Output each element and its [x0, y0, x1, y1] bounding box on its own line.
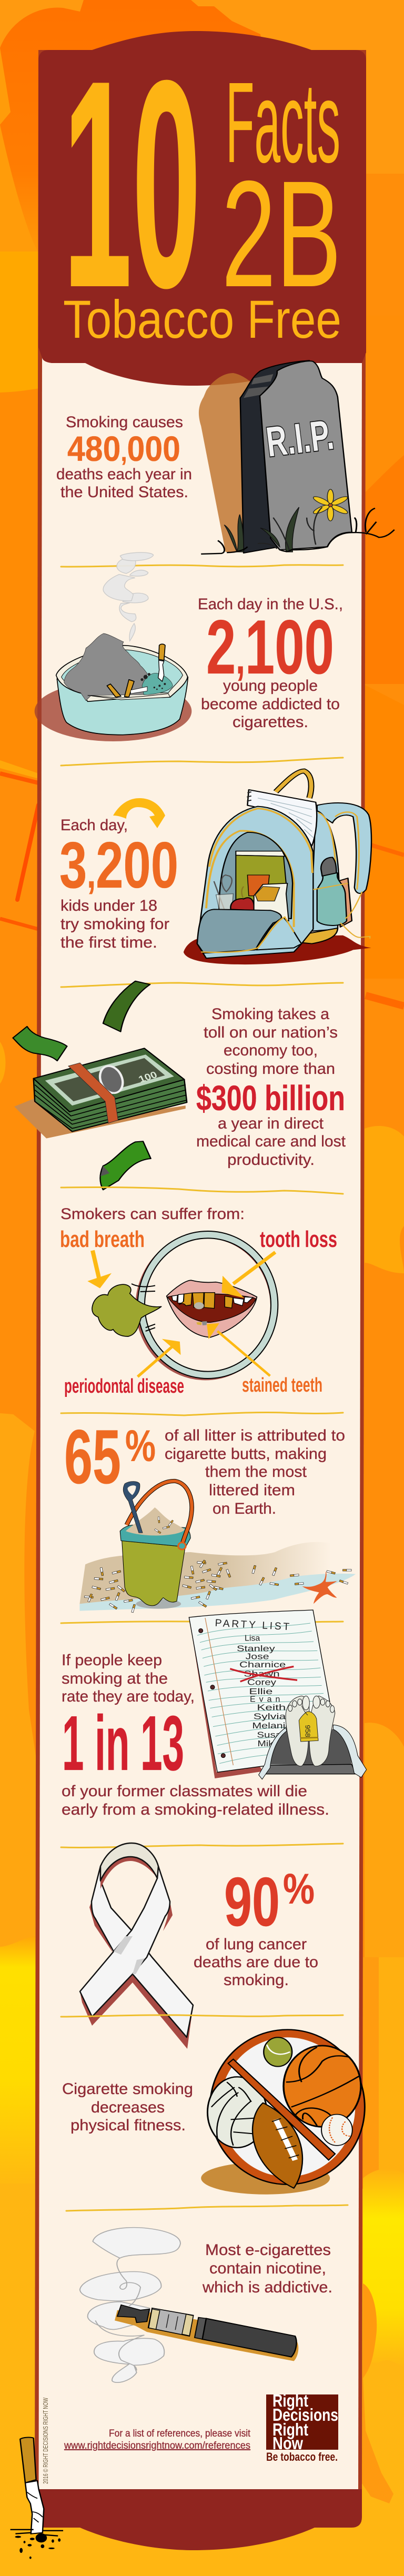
text: 2,100 young people — [198, 596, 343, 731]
text: e-cigarettes contain nicotine: contain nicotine, — [209, 2260, 326, 2277]
icon: party list and feet with toe tag: Jose — [246, 1652, 269, 1661]
icon: party list and feet with toe tag: Mike — [257, 1739, 279, 1748]
text: 3,200 kids under 18: kids under 18 — [60, 897, 157, 914]
text: 65% statistic: 65 — [64, 1414, 121, 1500]
logo: Right Decisions Right Now: Decisions — [272, 2405, 338, 2424]
icon: party list and feet with toe tag: Evan — [250, 1695, 280, 1704]
icon: awareness ribbon — [80, 1843, 193, 2049]
text: e-cigarettes contain nicotine: Most e-cigarettes — [205, 2241, 331, 2259]
text: if people keep smoking — [62, 1652, 195, 1705]
icon: party list and feet with toe tag: Melanie — [252, 1722, 291, 1730]
text: e-cigarettes contain nicotine: which is addictive. — [202, 2279, 332, 2296]
text: decreases physical fitness — [62, 2080, 193, 2134]
icon: money — [13, 981, 187, 1190]
text: $300 billion toll: $300 billion — [196, 1079, 345, 1118]
text: $300 billion toll — [196, 1005, 346, 1169]
logo: Right Decisions Right Now — [266, 2391, 338, 2463]
icon: tombstone — [199, 360, 395, 554]
fact 5: smokers can suffer from — [60, 1205, 337, 1397]
references note: For a list of references, please visit — [109, 2428, 251, 2439]
footer: credits and logo — [11, 2391, 362, 2559]
fact 9: physical fitness — [62, 2034, 361, 2195]
text: $300 billion toll: medical care and lost — [196, 1133, 346, 1150]
label: stained teeth: stained teeth — [242, 1374, 322, 1396]
logo: Right Decisions Right Now: Now — [272, 2433, 303, 2453]
icon: party list and feet with toe tag: Stanley — [237, 1644, 275, 1653]
title: Tobacco Free: Tobacco Free — [63, 289, 341, 349]
text: 90% of lung cancer deaths: of lung cancer — [206, 1936, 307, 1953]
text: 3,200 kids under 18: 3,200 — [59, 829, 178, 902]
icon: party list and feet with toe tag: 958 — [304, 1725, 311, 1737]
icon: ashtray — [35, 552, 191, 741]
text: 65% statistic: littered item — [209, 1482, 295, 1499]
text: $300 billion toll: costing more than — [206, 1060, 335, 1078]
icon: e-cigarette with vapor — [80, 2228, 298, 2382]
statistic: 1 in 13: 1 in 13 — [62, 1700, 184, 1787]
icon: party list and feet with toe tag: Sylvia — [254, 1712, 286, 1721]
text: smoking causes 480,000 deaths — [56, 414, 192, 501]
text: decreases physical fitness: Cigarette smoking — [62, 2080, 193, 2098]
text: former classmates — [62, 1783, 329, 1818]
text: decreases physical fitness: physical fitness. — [70, 2117, 186, 2134]
icon: mouth diagram — [88, 1235, 275, 1377]
text: 65% statistic: cigarette butts, making — [165, 1445, 327, 1463]
icon: stubbed cigarette butt — [11, 2438, 63, 2559]
text: former classmates: early from a smoking-related illness. — [62, 1801, 329, 1818]
text: 2,100 young people: 2,100 — [206, 604, 334, 690]
text: 2,100 young people: Each day in the U.S., — [198, 596, 343, 613]
fact 1: deaths each year — [56, 360, 395, 554]
icon: sports balls with prohibition sign — [201, 2034, 361, 2195]
text: former classmates: of your former classmates will die — [62, 1783, 307, 1800]
text: $300 billion toll: toll on our nation’s — [204, 1024, 338, 1041]
text: 3,200 kids under 18: the first time. — [60, 934, 157, 951]
text: 2,100 young people: young people — [223, 677, 318, 695]
fact 6: 65% of litter — [64, 1414, 358, 1613]
icon: curved arrow — [113, 798, 165, 828]
text: smoking causes 480,000 deaths: deaths each year in — [56, 466, 192, 483]
text: $300 billion toll: economy too, — [224, 1042, 318, 1059]
icon: party list and feet with toe tag: Ellie — [249, 1687, 272, 1696]
text: $300 billion toll: a year in direct — [218, 1115, 324, 1132]
logo: Right Decisions Right Now: Be tobacco free. — [266, 2450, 338, 2463]
text: if people keep smoking: If people keep — [62, 1652, 162, 1669]
text: 90% of lung cancer deaths: deaths are due to — [194, 1954, 318, 1971]
icon: party list and feet with toe tag: Corey — [247, 1678, 276, 1687]
bottom banner — [35, 2489, 362, 2550]
icon: backpack — [184, 771, 371, 964]
fact 7: 1 in 13 classmates — [62, 1610, 367, 1818]
label: bad breath: bad breath — [60, 1226, 145, 1252]
icon: R.I.P. inscription: R.I.P. — [264, 411, 336, 466]
text: decreases physical fitness: decreases — [91, 2099, 165, 2116]
text: smoking causes 480,000 deaths: Smoking causes — [66, 414, 183, 431]
header banner: 10 — [63, 19, 201, 349]
text: if people keep smoking: rate they are today, — [62, 1688, 195, 1705]
fact 8: 90% of lung cancer — [80, 1843, 318, 2049]
icon: party list and feet with toe tag: Shawn — [244, 1670, 280, 1679]
text: 90% of lung cancer deaths — [194, 1863, 318, 1989]
references note: www.rightdecisionsrightnow.com/references — [64, 2440, 250, 2451]
text: 3,200 kids under 18 — [59, 817, 178, 951]
text: 65% statistic: of all litter is attributed to — [165, 1427, 345, 1444]
text: 3,200 kids under 18: Each day, — [60, 817, 128, 834]
icon: money: 100 — [137, 1070, 159, 1085]
icon: party list and feet with toe tag: Charnice — [239, 1661, 286, 1669]
text: 65% statistic: % — [125, 1421, 156, 1471]
fact 3: kids try smoking — [59, 771, 371, 964]
label: tooth loss: tooth loss — [260, 1226, 337, 1252]
references note — [64, 2428, 251, 2451]
panel: cream body with brick border — [35, 50, 366, 2489]
text: $300 billion toll: productivity. — [227, 1151, 315, 1169]
icon: party list and feet with toe tag: Susan — [257, 1730, 288, 1739]
label: periodontal disease: periodontal disease — [64, 1375, 184, 1397]
fact 2: young people addicted — [35, 552, 343, 741]
icon: beach bucket with cigarette butts — [79, 1481, 358, 1613]
icon: party list and feet with toe tag: Lisa — [245, 1634, 260, 1643]
text: 65% statistic — [64, 1414, 345, 1517]
text: 2,100 young people: become addicted to — [201, 696, 340, 713]
text: 2,100 young people: cigarettes. — [233, 713, 308, 731]
title: 2B: 2B — [221, 149, 341, 319]
text: 3,200 kids under 18: try smoking for — [60, 915, 169, 933]
logo: Right Decisions Right Now: Right — [272, 2391, 308, 2410]
text: 90% of lung cancer deaths: smoking. — [224, 1971, 289, 1989]
fact 4: economic toll — [13, 981, 346, 1190]
text: 65% statistic: on Earth. — [213, 1500, 276, 1517]
text: 65% statistic: them the most — [205, 1463, 307, 1481]
text: smoking causes 480,000 deaths: the United States. — [60, 484, 188, 501]
heading: smokers can suffer from: Smokers can suffer from: — [60, 1205, 245, 1223]
text: if people keep smoking: smoking at the — [62, 1670, 168, 1687]
text: $300 billion toll: Smoking takes a — [211, 1005, 329, 1023]
logo: Right Decisions Right Now: Right — [272, 2420, 308, 2439]
icon: party list and feet with toe tag: Keith — [257, 1704, 286, 1713]
copyright: 2016 © RIGHT DECISIONS RIGHT NOW — [42, 2398, 49, 2484]
text: smoking causes 480,000 deaths: 480,000 — [67, 429, 180, 469]
text: 90% of lung cancer deaths: 90 — [224, 1863, 280, 1940]
icon: party list and feet with toe tag — [189, 1610, 367, 1779]
text: e-cigarettes contain nicotine — [202, 2241, 332, 2296]
text: 90% of lung cancer deaths: % — [283, 1865, 315, 1913]
icon: party list and feet with toe tag: PARTY LIST — [215, 1618, 290, 1633]
fact 10: e-cigarettes — [80, 2228, 332, 2382]
